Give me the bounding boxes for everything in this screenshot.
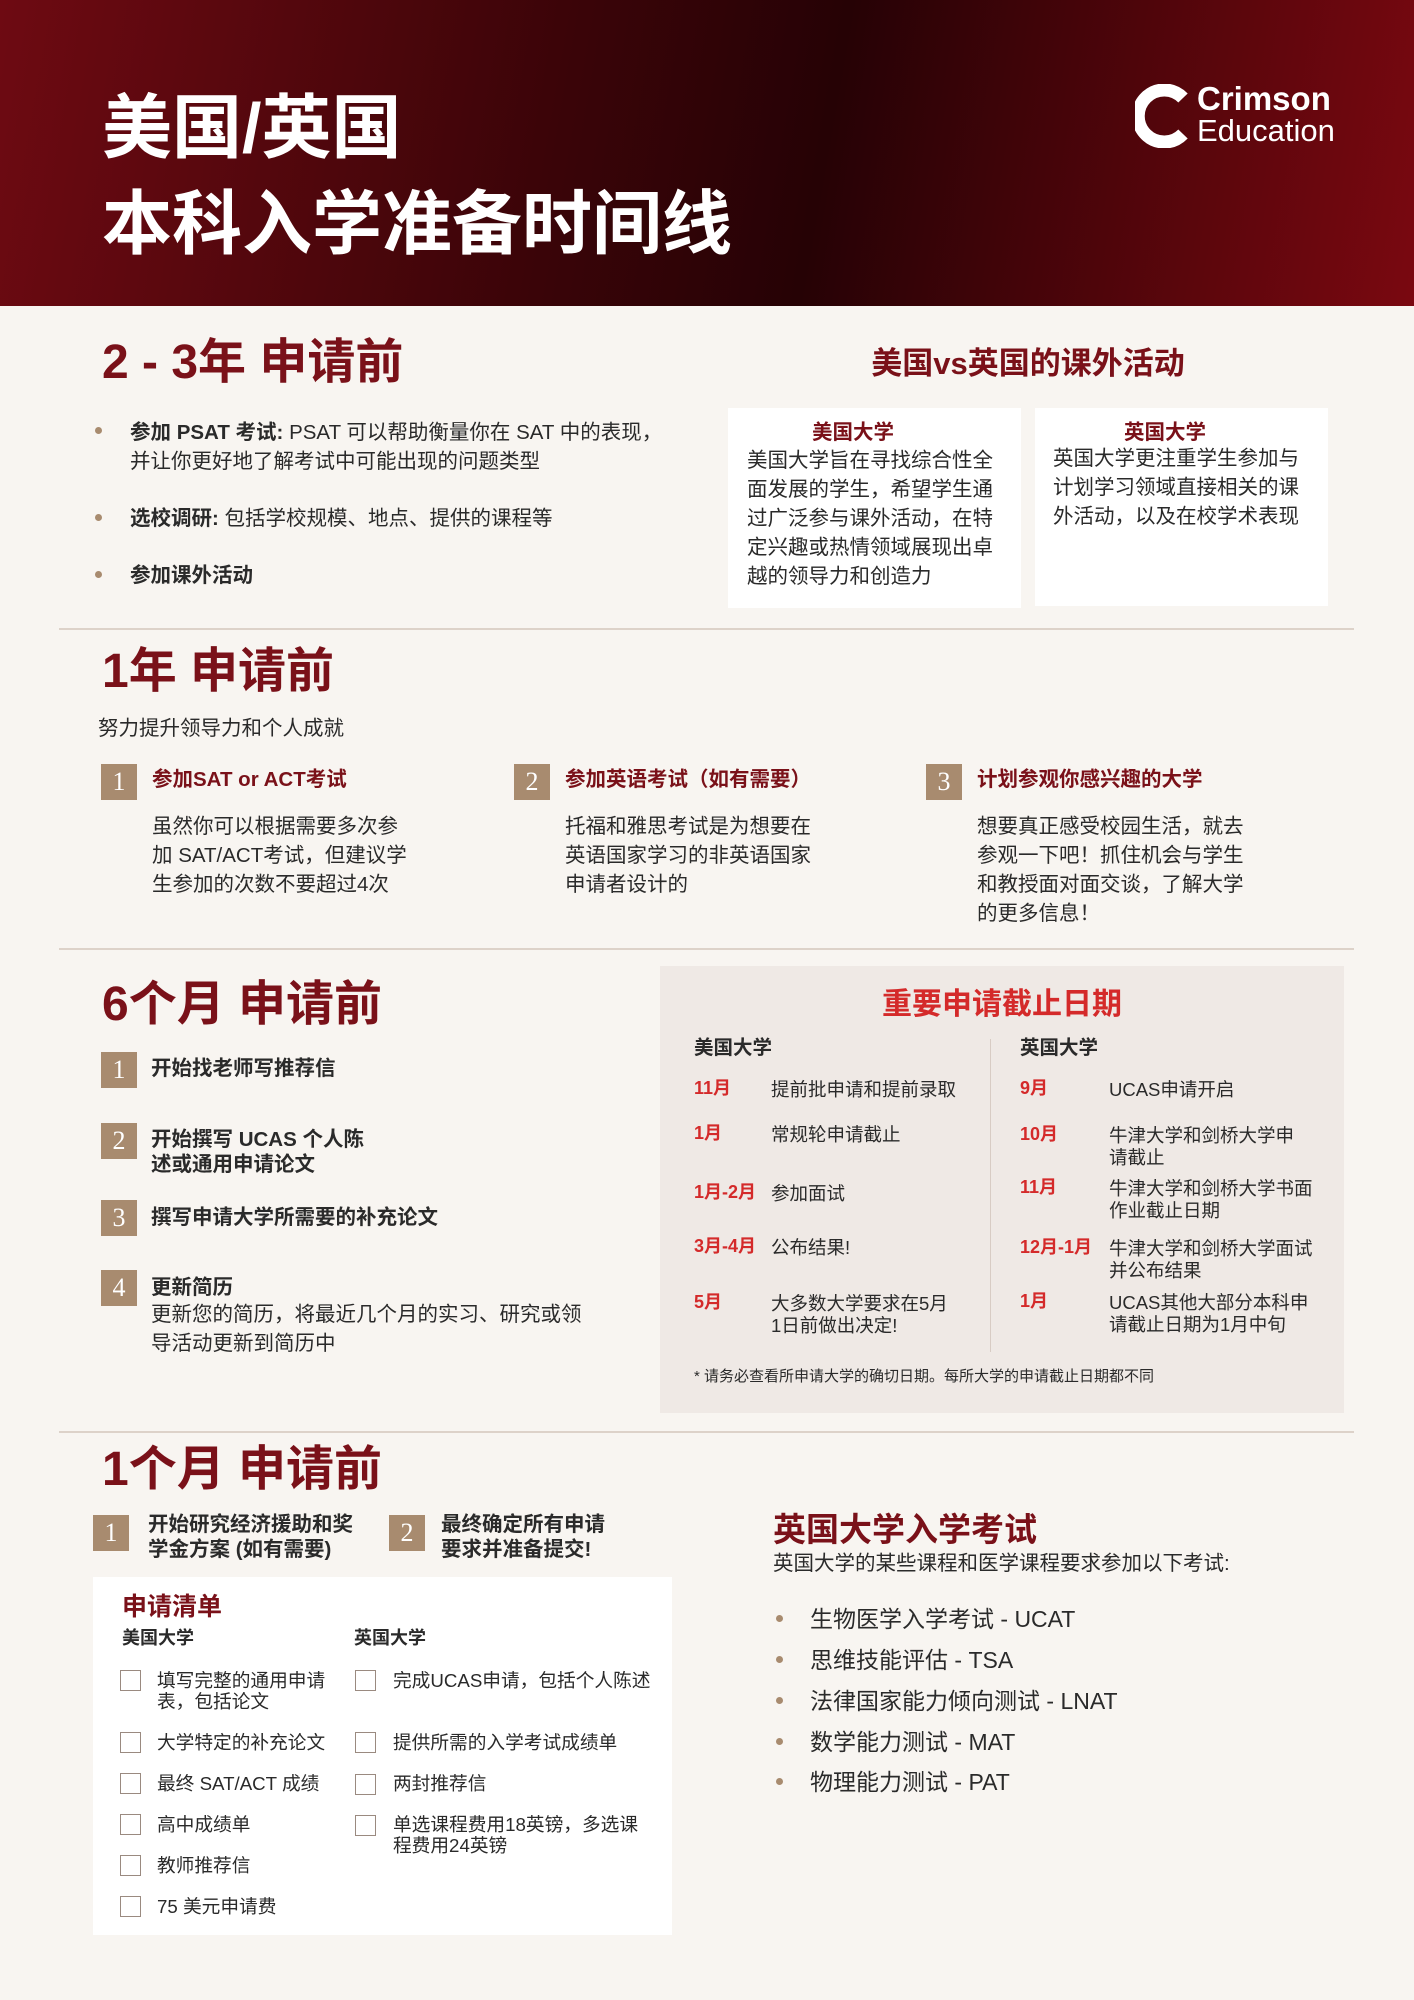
step 2 — [514, 764, 811, 896]
steps: 6 months: 更新您的简历，将最近几个月的实习、研究或领 — [151, 1303, 582, 1326]
panel: key deadlines: 请截止日期为1月中旬 — [1109, 1314, 1286, 1335]
step 2: 申请者设计的 — [565, 873, 688, 896]
panel: key deadlines: 提前批申请和提前录取 — [771, 1079, 956, 1100]
header banner — [0, 0, 1414, 306]
step 2: 英语国家学习的非英语国家 — [565, 844, 811, 867]
panel: key deadlines: 牛津大学和剑桥大学书面 — [1109, 1178, 1313, 1199]
checklist card: 表，包括论文 — [157, 1691, 269, 1712]
steps: 1 month: 最终确定所有申请 — [441, 1513, 605, 1536]
step 2: 2 — [526, 767, 538, 796]
panel: key deadlines: 常规轮申请截止 — [771, 1124, 901, 1145]
section heading: 6 months: 6个月 申请前 — [102, 978, 382, 1031]
card: US: 美国大学旨在寻找综合性全 — [747, 449, 993, 472]
steps: 6 months: 开始撰写 UCAS 个人陈 — [151, 1128, 364, 1151]
heading: US vs UK extracurricular: 美国vs英国的课外活动 — [871, 346, 1185, 381]
checklist card: 完成UCAS申请，包括个人陈述 — [393, 1670, 650, 1691]
steps: 6 months: 更新简历 — [151, 1276, 233, 1299]
steps: 6 months: 开始找老师写推荐信 — [151, 1057, 336, 1080]
steps: 1 month: 学金方案 (如有需要) — [148, 1538, 331, 1561]
title — [102, 89, 732, 263]
card: US: 美国大学 — [812, 421, 894, 444]
checklist card: 75 美元申请费 — [157, 1896, 276, 1917]
checklist card: 最终 SAT/ACT 成绩 — [157, 1773, 319, 1794]
steps: 1 month — [93, 1513, 605, 1561]
step 3: 计划参观你感兴趣的大学 — [977, 768, 1202, 791]
bullets: 2-3 years: 并让你更好地了解考试中可能出现的问题类型 — [130, 450, 540, 473]
panel: key deadlines: 12月-1月 — [1020, 1237, 1092, 1257]
card: US — [728, 408, 1021, 608]
checklist card: 填写完整的通用申请 — [157, 1670, 325, 1691]
steps: 6 months: 述或通用申请论文 — [151, 1153, 315, 1176]
steps: 6 months: 3 — [112, 1203, 126, 1232]
panel: key deadlines: 公布结果! — [771, 1237, 850, 1258]
step 3 — [926, 764, 1244, 925]
UK admission tests: 英国大学的某些课程和医学课程要求参加以下考试: — [773, 1552, 1230, 1575]
card: UK: 英国大学 — [1124, 421, 1206, 444]
checklist card: 单选课程费用18英镑，多选课 — [393, 1814, 638, 1835]
card: US: 过广泛参与课外活动，在特 — [747, 507, 993, 530]
checklist card: 大学特定的补充论文 — [157, 1732, 325, 1753]
steps: 1 month: 要求并准备提交! — [441, 1538, 591, 1561]
bullets: 2-3 years: 选校调研: 包括学校规模、地点、提供的课程等 — [130, 507, 553, 530]
panel: key deadlines: 1月 — [1020, 1291, 1048, 1311]
panel: key deadlines: 重要申请截止日期 — [882, 988, 1122, 1021]
card: UK: 外活动，以及在校学术表现 — [1053, 505, 1299, 528]
step 3: 3 — [938, 767, 950, 796]
step 2: 托福和雅思考试是为想要在 — [565, 815, 811, 838]
step 3: 想要真正感受校园生活，就去 — [977, 815, 1244, 838]
panel: key deadlines: UCAS其他大部分本科申 — [1109, 1292, 1308, 1313]
steps: 6 months: 1 — [112, 1055, 126, 1084]
step 1: 参加SAT or ACT考试 — [152, 768, 347, 791]
panel: key deadlines: 英国大学 — [1020, 1037, 1098, 1059]
steps: 6 months: 4 — [112, 1273, 126, 1302]
panel: key deadlines: 牛津大学和剑桥大学面试 — [1109, 1238, 1313, 1259]
panel: key deadlines: 请截止 — [1109, 1147, 1165, 1168]
panel: key deadlines: UCAS申请开启 — [1109, 1079, 1234, 1100]
step 3: 参观一下吧！抓住机会与学生 — [977, 844, 1244, 867]
card: US: 越的领导力和创造力 — [747, 565, 932, 588]
step 1: 虽然你可以根据需要多次参 — [152, 815, 398, 838]
checklist card: 教师推荐信 — [157, 1855, 250, 1876]
step 3: 和教授面对面交谈，了解大学 — [977, 873, 1244, 896]
panel: key deadlines: 5月 — [694, 1292, 722, 1312]
panel: key deadlines: 9月 — [1020, 1078, 1048, 1098]
checklist card: 高中成绩单 — [157, 1814, 250, 1835]
panel: key deadlines: 美国大学 — [694, 1037, 772, 1059]
UK admission tests: 法律国家能力倾向测试 - LNAT — [810, 1688, 1118, 1714]
bullets: 2-3 years: 参加 PSAT 考试: PSAT 可以帮助衡量你在 SAT 中的表现， — [130, 421, 662, 444]
panel: key deadlines: 参加面试 — [771, 1183, 845, 1204]
panel: key deadlines: 大多数大学要求在5月 — [771, 1293, 948, 1314]
UK admission tests: 生物医学入学考试 - UCAT — [810, 1606, 1075, 1632]
panel: key deadlines: 11月 — [1020, 1177, 1057, 1197]
step 1: 加 SAT/ACT考试，但建议学 — [152, 844, 407, 867]
checklist card: 申请清单 — [122, 1593, 222, 1621]
checklist card: 提供所需的入学考试成绩单 — [393, 1732, 617, 1753]
checklist card: 程费用24英镑 — [393, 1835, 507, 1856]
panel: key deadlines: 3月-4月 — [694, 1236, 756, 1256]
panel: key deadlines: 1日前做出决定! — [771, 1315, 897, 1336]
steps: 6 months: 导活动更新到简历中 — [151, 1332, 336, 1355]
title: 本科入学准备时间线 — [102, 185, 732, 263]
card: US: 面发展的学生，希望学生通 — [747, 478, 993, 501]
step 1: 生参加的次数不要超过4次 — [152, 873, 389, 896]
steps: 1 month: 2 — [400, 1518, 414, 1547]
step 1: 1 — [112, 767, 126, 796]
logo — [1135, 80, 1335, 148]
card: US: 定兴趣或热情领域展现出卓 — [747, 536, 993, 559]
UK admission tests: 思维技能评估 - TSA — [810, 1647, 1013, 1673]
panel: key deadlines: * 请务必查看所申请大学的确切日期。每所大学的申请截止日期都不同 — [694, 1368, 1154, 1385]
panel: key deadlines: 11月 — [694, 1078, 731, 1098]
card: UK — [1035, 408, 1328, 606]
checklist card: 两封推荐信 — [393, 1773, 486, 1794]
steps: 6 months — [101, 1052, 582, 1355]
panel: key deadlines: 并公布结果 — [1109, 1260, 1202, 1281]
card: UK: 计划学习领域直接相关的课 — [1053, 476, 1299, 499]
steps: 1 month: 开始研究经济援助和奖 — [148, 1513, 353, 1536]
panel: key deadlines: 1月 — [694, 1123, 722, 1143]
UK admission tests — [773, 1511, 1230, 1795]
logo: Education — [1197, 113, 1335, 148]
steps: 6 months: 撰写申请大学所需要的补充论文 — [151, 1206, 438, 1229]
section heading: 1 month: 1个月 申请前 — [102, 1443, 382, 1496]
subtitle: 努力提升领导力和个人成就 — [98, 717, 344, 740]
step 2: 参加英语考试（如有需要） — [565, 768, 811, 791]
logo: Crimson — [1197, 80, 1331, 117]
checklist card — [93, 1577, 672, 1935]
panel: key deadlines — [660, 966, 1344, 1413]
title: 美国/英国 — [102, 89, 401, 167]
section heading: 2-3 years: 2 - 3年 申请前 — [102, 336, 403, 389]
step 1 — [101, 764, 407, 896]
checklist card: 美国大学 — [122, 1628, 194, 1648]
panel: key deadlines: 牛津大学和剑桥大学申 — [1109, 1125, 1294, 1146]
panel: key deadlines: 1月-2月 — [694, 1182, 756, 1202]
UK admission tests: 数学能力测试 - MAT — [810, 1729, 1015, 1755]
section heading: 1 year: 1年 申请前 — [102, 645, 334, 698]
UK admission tests: 物理能力测试 - PAT — [810, 1769, 1010, 1795]
step 3: 的更多信息！ — [977, 902, 1100, 925]
checklist card: 英国大学 — [354, 1628, 426, 1648]
card: UK: 英国大学更注重学生参加与 — [1053, 447, 1299, 470]
panel: key deadlines: 作业截止日期 — [1109, 1200, 1220, 1221]
steps: 1 month: 1 — [104, 1518, 118, 1547]
bullets: 2-3 years: 参加课外活动 — [130, 564, 253, 587]
bullets: 2-3 years — [95, 421, 662, 587]
panel: key deadlines: 10月 — [1020, 1124, 1058, 1144]
steps: 6 months: 2 — [112, 1126, 126, 1155]
UK admission tests: 英国大学入学考试 — [773, 1511, 1037, 1548]
